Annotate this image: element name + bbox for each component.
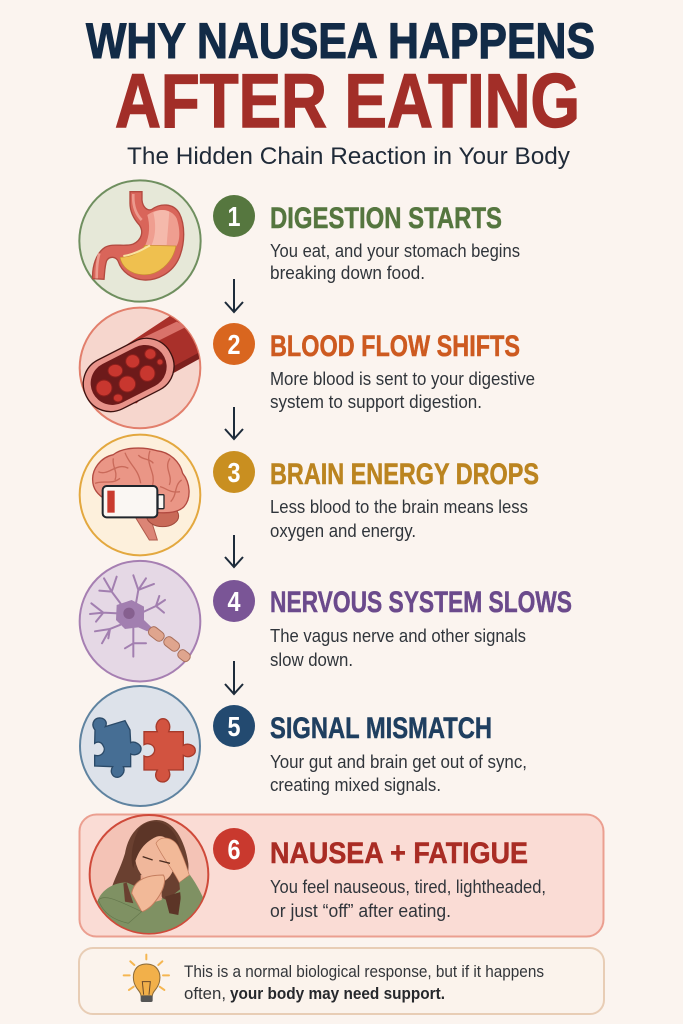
step 1 [213, 195, 520, 283]
title: WHY NAUSEA HAPPENS [86, 13, 595, 69]
note text: This is a normal biological response, but if it happens [184, 963, 544, 981]
heading 6: NAUSEA + FATIGUE [270, 837, 528, 870]
heading 3: BRAIN ENERGY DROPS [270, 458, 539, 491]
description 5: creating mixed signals. [270, 775, 441, 795]
description 1: You eat, and your stomach begins [270, 241, 520, 261]
description 2 [270, 369, 535, 412]
badge 2 [213, 323, 255, 365]
badge 5 [213, 705, 255, 747]
heading 4: NERVOUS SYSTEM SLOWS [270, 586, 572, 619]
description 2: system to support digestion. [270, 392, 482, 412]
icon: puzzle pieces [80, 686, 200, 806]
description 6: You feel nauseous, tired, lightheaded, [270, 877, 546, 897]
title: AFTER EATING [115, 59, 580, 144]
description 1 [270, 241, 520, 283]
description 3 [270, 497, 528, 541]
icon: neuron [80, 561, 200, 681]
heading 2: BLOOD FLOW SHIFTS [270, 330, 520, 363]
step 6 [213, 828, 546, 921]
description 2: More blood is sent to your digestive [270, 369, 535, 389]
badge 4 [213, 580, 255, 622]
arrow: step 4 to 5 [225, 661, 243, 694]
badge 3 [213, 451, 255, 493]
description 4: slow down. [270, 650, 353, 670]
arrow: step 1 to 2 [225, 279, 243, 312]
panel: note [79, 948, 604, 1014]
badge 6: 6 [228, 834, 240, 865]
description 4 [270, 626, 526, 670]
arrow: step 3 to 4 [225, 535, 243, 567]
description 1: breaking down food. [270, 263, 425, 283]
heading 1: DIGESTION STARTS [270, 202, 502, 235]
step 3 [213, 451, 539, 541]
icon: stomach [79, 180, 201, 302]
description 4: The vagus nerve and other signals [270, 626, 526, 646]
icon: woman feeling nauseous [90, 815, 208, 940]
note text: your body may need support. [230, 985, 445, 1003]
description 5 [270, 752, 527, 795]
badge 1 [213, 195, 255, 237]
badge 1: 1 [228, 201, 240, 232]
step 5 [213, 705, 527, 795]
step 2 [213, 323, 535, 412]
badge 3: 3 [228, 457, 240, 488]
subtitle: The Hidden Chain Reaction in Your Body [127, 143, 570, 170]
description 3: oxygen and energy. [270, 521, 416, 541]
heading 5: SIGNAL MISMATCH [270, 712, 492, 745]
note text [184, 963, 544, 1003]
icon: brain with low battery [80, 435, 200, 555]
badge 6 [213, 828, 255, 870]
description 5: Your gut and brain get out of sync, [270, 752, 527, 772]
note text: often, [184, 985, 226, 1003]
panel: nausea and fatigue [80, 814, 604, 936]
badge 2: 2 [228, 329, 240, 360]
badge 4: 4 [228, 586, 241, 617]
title [86, 13, 595, 144]
step 4 [213, 580, 572, 670]
icon: blood vessel [74, 308, 210, 428]
description 6 [270, 877, 546, 921]
icon: light bulb [124, 955, 169, 1002]
description 3: Less blood to the brain means less [270, 497, 528, 517]
description 6: or just “off” after eating. [270, 901, 451, 921]
arrow: step 2 to 3 [225, 407, 243, 439]
badge 5: 5 [228, 711, 240, 742]
